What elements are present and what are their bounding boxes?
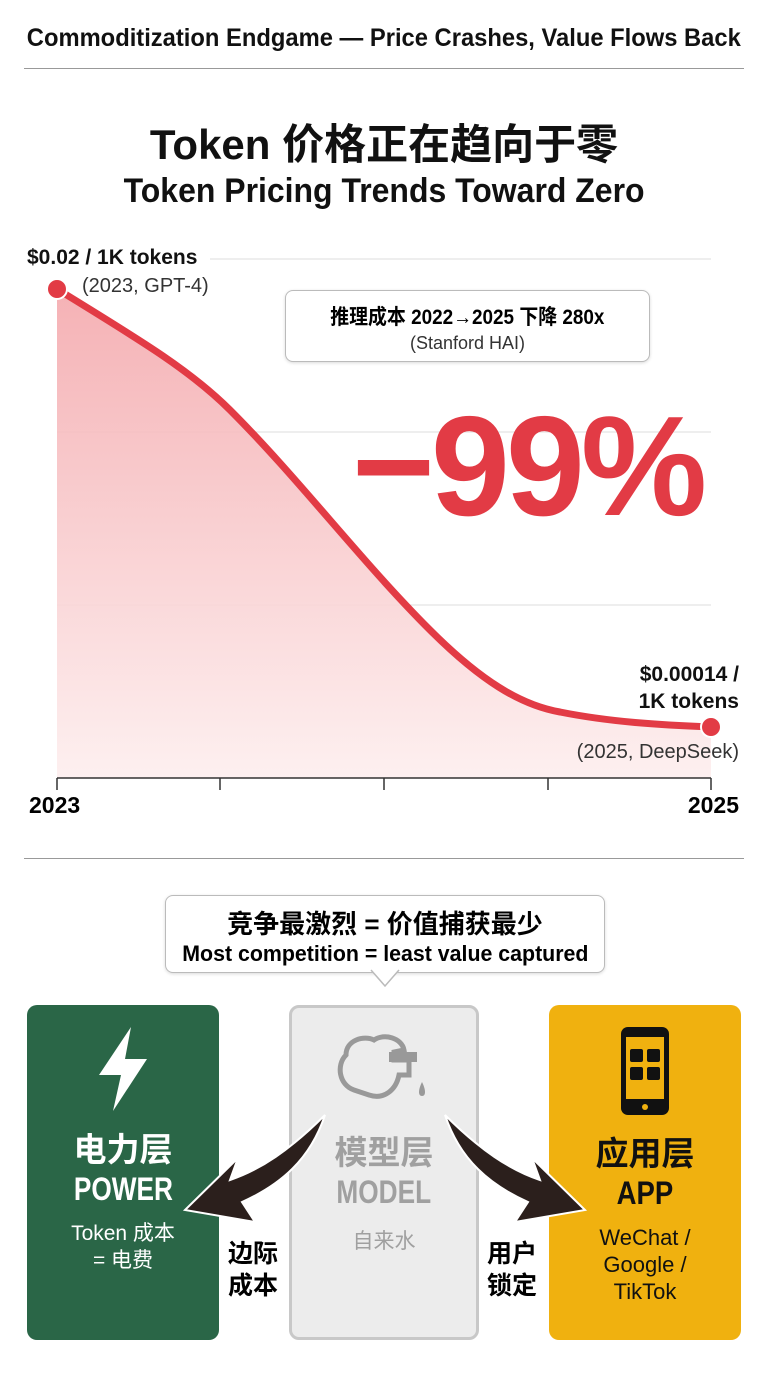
panel: app: WeChat / [599, 1225, 691, 1250]
heading: Token 价格正在趋向于零 [150, 121, 618, 168]
big number: −99% [352, 387, 703, 546]
panel: app: TikTok [614, 1279, 676, 1304]
arrow: left [183, 1114, 326, 1221]
text: (2023, GPT-4) [82, 275, 209, 297]
panel: app: Google / [603, 1252, 687, 1277]
text: 2025 [688, 792, 739, 818]
callout: stanford: 推理成本 2022→2025 下降 280x [330, 306, 605, 329]
panel: model: 自来水 [352, 1230, 416, 1253]
icon: lightning [99, 1027, 147, 1111]
callout: stanford [285, 290, 650, 362]
label: end price: $0.00014 / [640, 663, 739, 686]
icon: brain faucet [338, 1034, 425, 1099]
panel: power: POWER [73, 1171, 173, 1207]
label: end price: 1K tokens [639, 690, 739, 713]
icon: phone [621, 1027, 669, 1115]
panel: power [27, 1005, 219, 1340]
panel: power: 电力层 [74, 1131, 172, 1168]
callout: competition: 竞争最激烈 = 价值捕获最少 [227, 909, 543, 939]
heading: Token Pricing Trends Toward Zero [124, 172, 644, 210]
chart [48, 258, 720, 790]
label: end price [639, 663, 739, 713]
label: user lock: 用户 [487, 1240, 537, 1268]
panel: model [289, 1005, 479, 1340]
callout: competition [165, 895, 605, 973]
title: Commoditization Endgame — Price Crashes, Value Flows Back [27, 24, 741, 52]
panel: power: Token 成本 [71, 1222, 175, 1245]
axis labels: 2023 [29, 792, 80, 818]
panel: power: = 电费 [93, 1249, 153, 1272]
label: start price: $0.02 / 1K tokens [27, 246, 197, 269]
label: user lock: 锁定 [487, 1272, 537, 1300]
panel: app: 应用层 [596, 1135, 694, 1172]
arrow: right [444, 1114, 587, 1221]
label: marginal cost [228, 1240, 278, 1300]
text: (2025, DeepSeek) [577, 741, 739, 763]
panel: app: APP [617, 1175, 673, 1211]
heading [124, 121, 644, 210]
callout: competition: Most competition = least value captured [182, 941, 588, 966]
panel: model: MODEL [337, 1174, 431, 1210]
panel: model: 模型层 [334, 1134, 434, 1171]
label: marginal cost: 成本 [228, 1272, 278, 1300]
label: marginal cost: 边际 [228, 1240, 278, 1268]
panel: app [549, 1005, 741, 1340]
label: user lock [487, 1240, 537, 1300]
callout: stanford: (Stanford HAI) [410, 333, 525, 353]
